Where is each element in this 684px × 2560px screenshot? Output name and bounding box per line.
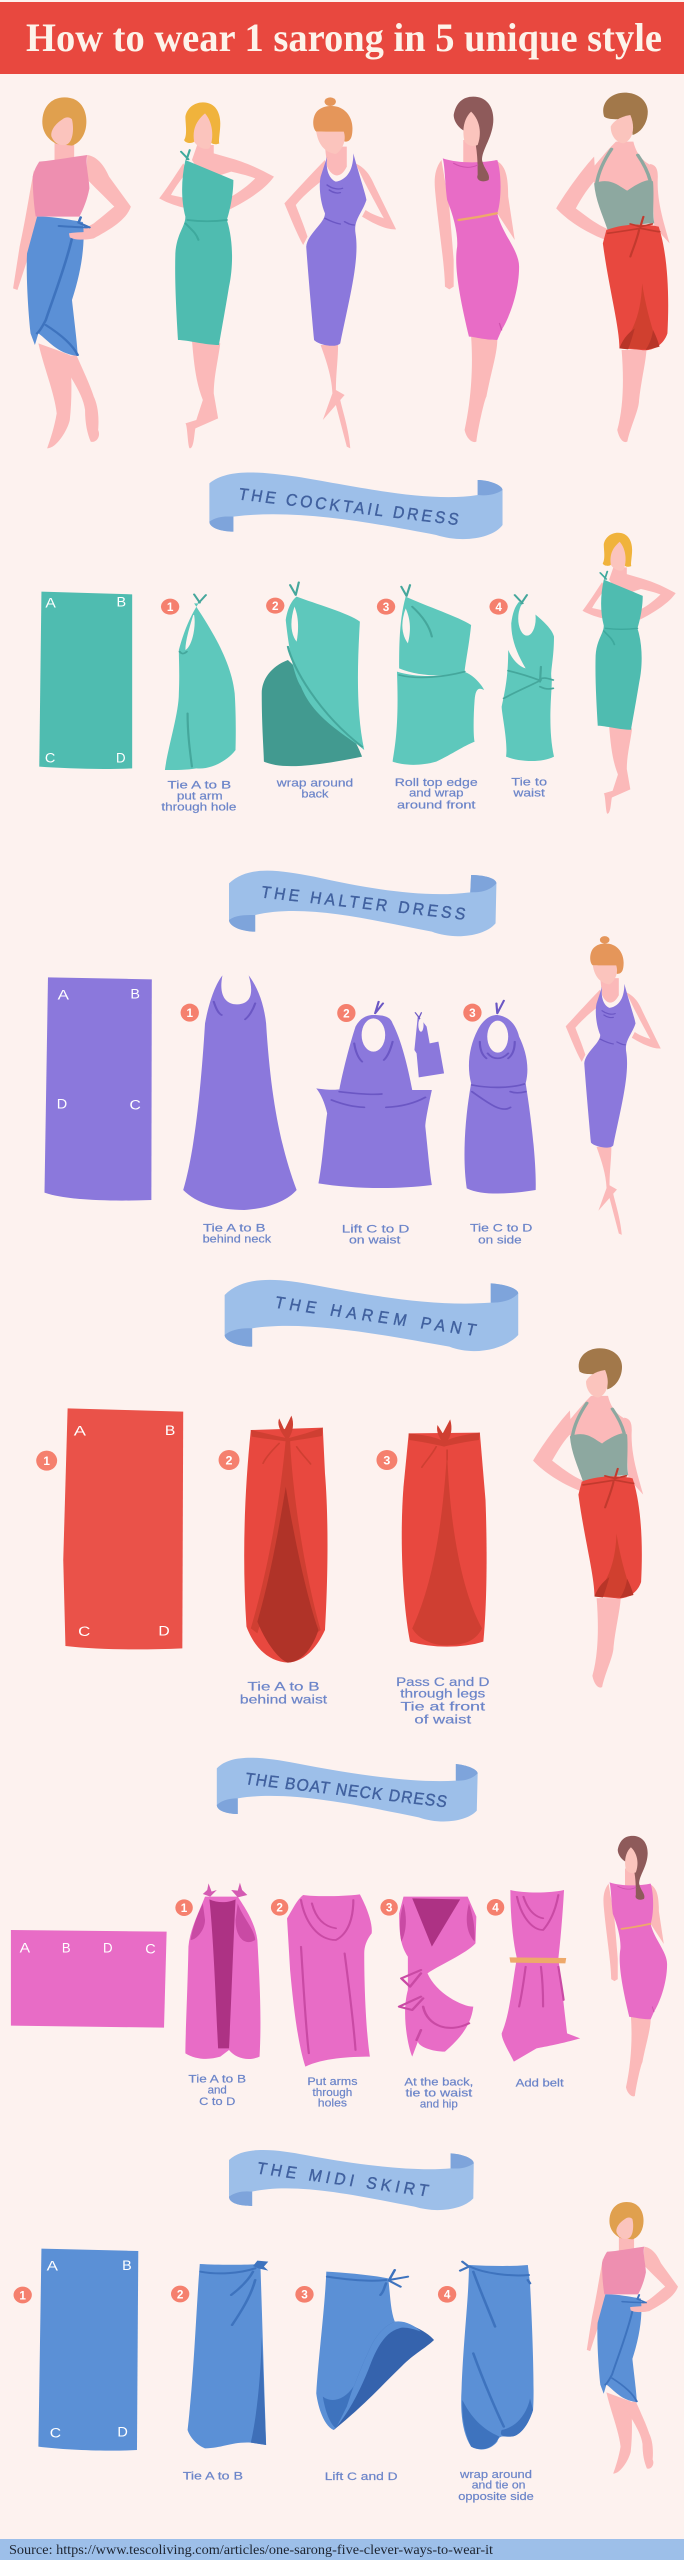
step captions: Tie at front [400,1700,485,1714]
step captions: Tie A to B [248,1680,320,1694]
model: boat neck dress [435,97,519,442]
step 2 garment: 2 [343,1006,350,1020]
source bar [0,2539,684,2560]
flat sarong A B D C: A [58,987,69,1003]
step captions: on waist [349,1233,401,1246]
banner: the harem pant: THE HAREM PANT [273,1294,478,1340]
step 4 garment: 4 [444,2288,451,2301]
model: harem pant [556,93,670,442]
step 3 garment: 3 [383,600,390,614]
step captions: and hip [420,2097,458,2110]
model: cocktail dress finished [583,533,676,814]
step 2 garment: 2 [276,1901,283,1914]
panel: the boat neck dress [11,1758,667,2110]
step captions: Tie C to D [470,1221,532,1234]
flat sarong A B C D: C [78,1624,91,1639]
step captions: through hole [161,800,236,813]
step captions: C to D [199,2095,235,2108]
flat sarong A B C D: B [116,595,126,610]
step 3 garment [295,2270,434,2430]
flat sarong A B C D: C [50,2425,61,2441]
step 2 mini view of back [414,1013,444,1077]
step captions: Lift C and D [325,2470,398,2483]
banner: the cocktail dress: THE COCKTAIL DRESS [237,485,461,529]
model: midi skirt finished [587,2202,678,2474]
step captions: Put arms [307,2075,357,2088]
flat sarong A B C D: C [45,751,56,766]
step captions: tie to waist [405,2086,473,2099]
banner: the boat neck dress: THE BOAT NECK DRESS [243,1770,449,1811]
banner: the halter dress: THE HALTER DRESS [260,883,467,924]
title: How to wear 1 sarong in 5 unique style [26,15,662,60]
step captions: and wrap [409,786,463,799]
step captions: opposite side [458,2490,534,2503]
banner: the harem pant [225,1280,518,1351]
flat sarong A B C D: D [116,751,126,766]
step 2 garment [271,1894,372,2067]
panel: the cocktail dress [39,472,676,814]
step 2 garment [262,582,364,766]
step 3 garment [377,585,484,765]
banner: the midi skirt: THE MIDI SKIRT [255,2159,430,2200]
step 4 garment: 4 [495,600,502,614]
flat sarong A B C D: A [47,2259,58,2274]
step captions: Tie A to B [203,1221,265,1234]
step captions: Pass C and D [396,1676,489,1689]
step captions: Tie A to B [183,2469,243,2482]
step captions: behind waist [240,1693,327,1707]
flat sarong A B C D [14,2249,138,2451]
step captions: back [301,787,329,800]
step captions: wrap around [276,776,353,789]
step captions [203,1221,532,1246]
title [0,2,684,74]
model: midi skirt [13,97,131,448]
step captions: Tie A to B [188,2072,246,2085]
step captions [183,2468,534,2503]
flat sarong A B D C: B [62,1940,71,1956]
flat sarong A B D C: B [130,987,140,1002]
step 4 garment [489,595,554,761]
flat sarong A B D C: D [103,1941,113,1956]
step captions: holes [318,2096,347,2109]
model: harem pant finished [533,1348,643,1688]
step captions: Roll top edge [395,776,478,789]
step 4 garment: 4 [492,1901,499,1914]
step 3 garment [380,1897,476,2057]
panel: the halter dress [44,871,661,1246]
flat sarong A B C D: D [158,1623,170,1639]
step 4 garment [487,1890,580,2062]
step 3 garment [376,1419,487,1647]
model: halter dress finished [566,936,661,1235]
step captions: waist [512,786,545,799]
step 1 garment: 1 [186,1006,193,1020]
step 2 garment [171,2261,268,2448]
flat sarong A B D C: C [145,1941,156,1957]
flat sarong A B C D: 1 [19,2288,26,2302]
step captions: Tie to [511,775,547,788]
flat sarong A B D C [11,1930,167,2028]
step 1 garment [161,594,236,770]
step captions: and tie on [472,2478,525,2491]
flat sarong A B C D: B [122,2258,132,2273]
step captions: Tie A to B [168,778,231,791]
model: cocktail dress [159,102,274,448]
banner: the halter dress [229,871,496,936]
step 1 garment: 1 [181,1901,188,1915]
step 3 garment [463,1001,536,1194]
step 2 garment [316,1002,432,1188]
source bar: Source: https://www.tescoliving.com/articles/one-sarong-five-clever-ways-to-wear-it [9,2543,493,2558]
flat sarong A B C D: B [165,1423,175,1438]
step 1 garment [175,1883,260,2059]
step 2 garment: 2 [272,599,279,613]
step 3 garment: 3 [469,1006,476,1020]
step captions: on side [478,1233,522,1246]
panel: the midi skirt [14,2150,678,2503]
step 2 garment [219,1416,328,1663]
step captions [240,1676,489,1727]
step captions: through [313,2086,352,2099]
step 1 garment: 1 [167,600,174,614]
step captions: behind neck [203,1232,272,1245]
panel: the harem pant [36,1280,643,1727]
step captions: Lift C to D [342,1222,409,1235]
step 3 garment: 3 [386,1901,393,1914]
step captions: At the back, [404,2075,473,2088]
step 2 garment: 2 [226,1453,233,1467]
step captions: and [208,2083,227,2096]
five models hero row [13,93,670,448]
flat sarong A B D C: A [20,1941,30,1956]
flat sarong A B C D [36,1408,183,1649]
banner: the cocktail dress [209,472,503,539]
step captions: put arm [177,789,223,802]
flat sarong A B C D: A [45,595,56,611]
step 3 garment: 3 [301,2288,308,2301]
step captions: Add belt [516,2076,564,2089]
flat sarong A B D C [44,977,152,1201]
step 2 garment: 2 [177,2287,184,2301]
step captions: of waist [414,1713,471,1727]
step captions: around front [397,798,476,811]
flat sarong A B C D: 1 [43,1454,50,1468]
step captions: wrap around [459,2468,532,2481]
banner: the midi skirt [229,2150,474,2210]
step 1 garment [181,975,297,1210]
step captions: through legs [400,1687,485,1701]
flat sarong A B C D: D [117,2425,128,2440]
flat sarong A B D C: C [130,1097,141,1113]
model: boat neck dress finished [603,1836,667,2096]
model: halter dress [284,97,396,448]
flat sarong A B D C: D [57,1097,67,1112]
step captions [161,775,547,813]
flat sarong A B C D [39,592,132,769]
step captions [188,2072,564,2110]
flat sarong A B C D: A [74,1424,86,1439]
banner: the boat neck dress [217,1758,478,1821]
step 3 garment: 3 [383,1453,391,1467]
step 4 garment [438,2262,534,2449]
